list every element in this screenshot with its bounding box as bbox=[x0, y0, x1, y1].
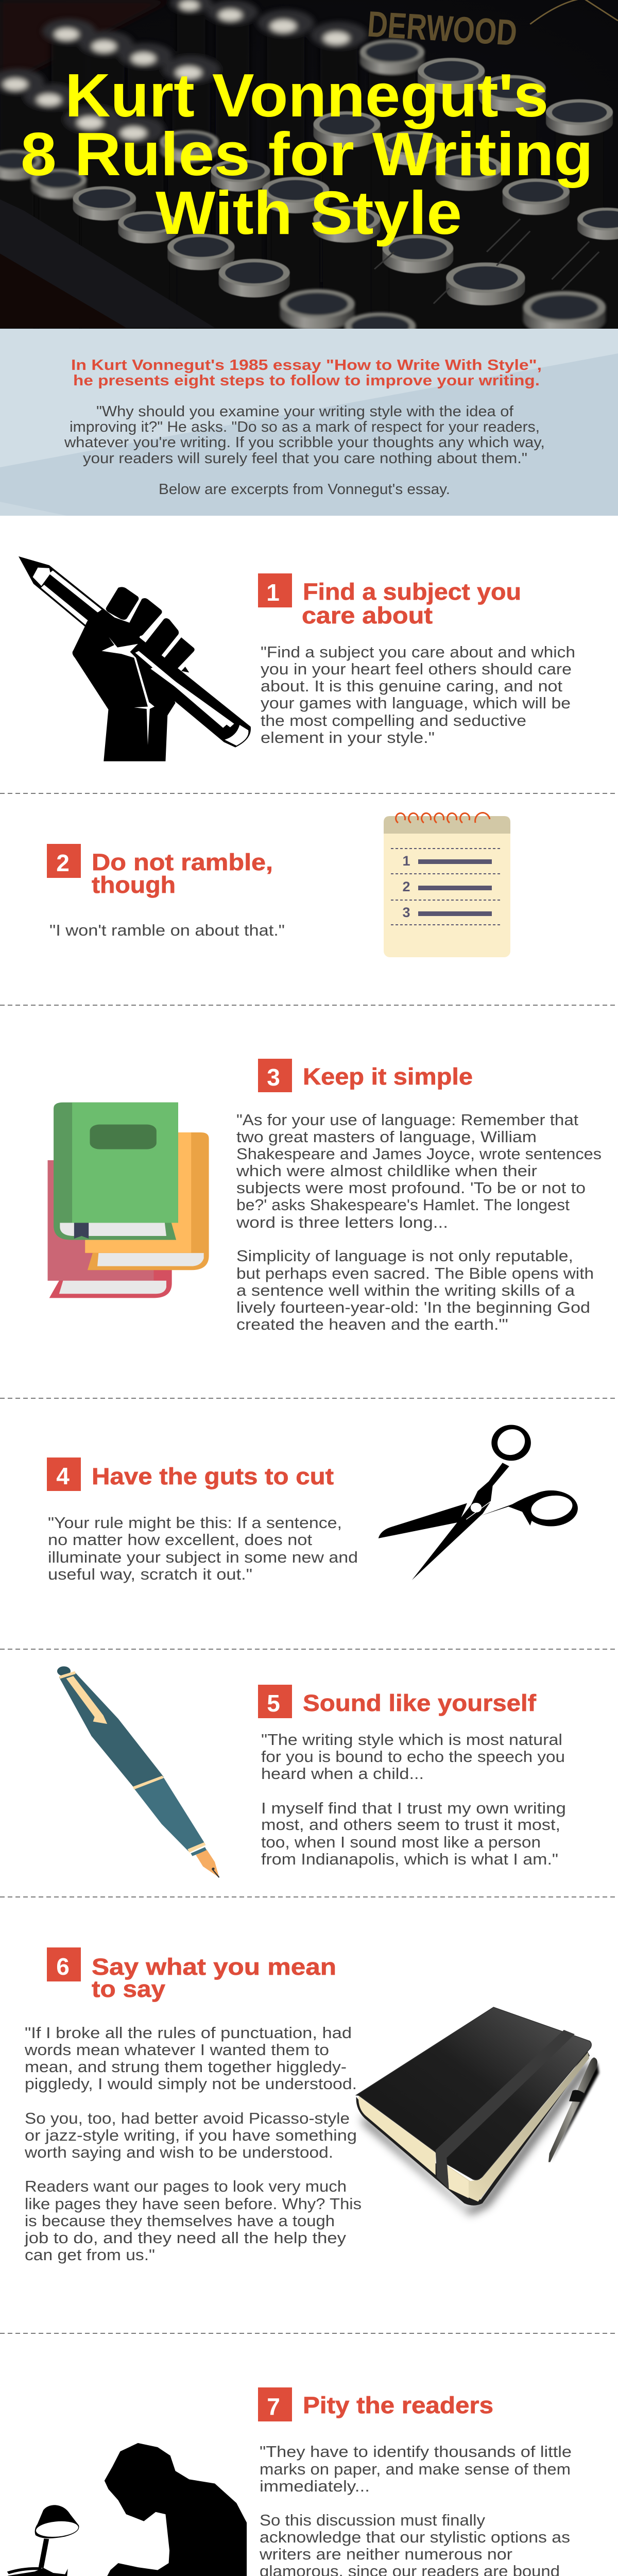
text 7 bbox=[259, 2443, 572, 2576]
number badge 7 bbox=[258, 2387, 292, 2421]
text 6: worth saying and wish to be understood. bbox=[24, 2143, 333, 2161]
typewriter keys photo bbox=[0, 0, 618, 329]
text 1: "Find a subject you care about and which bbox=[261, 643, 575, 661]
text 5: heard when a child... bbox=[261, 1765, 424, 1783]
hero: typewriter photo with title bbox=[0, 0, 618, 329]
text 6: So you, too, had better avoid Picasso-style bbox=[25, 2109, 350, 2127]
text 3: but perhaps even sacred. The Bible opens with bbox=[236, 1264, 594, 1282]
heading 1: Find a subject you bbox=[303, 579, 521, 605]
number badge 2: 2 bbox=[56, 850, 70, 876]
text 7: writers are neither numerous nor bbox=[259, 2545, 512, 2563]
text 3: which were almost childlike when their bbox=[236, 1162, 537, 1180]
heading 2: though bbox=[92, 872, 176, 898]
intro heading: he presents eight steps to follow to improve your writing. bbox=[73, 372, 540, 389]
intro heading bbox=[71, 357, 542, 389]
text 6: words mean whatever I wanted them to bbox=[24, 2041, 329, 2059]
text 6: job to do, and they need all the help they bbox=[24, 2229, 347, 2247]
icon: black notebook and pen bbox=[356, 2007, 599, 2214]
text 7: acknowledge that our stylistic options as bbox=[260, 2528, 570, 2546]
text 7: So this discussion must finally bbox=[260, 2511, 486, 2529]
text 6: is because they themselves have a tough bbox=[25, 2212, 335, 2230]
icon: notepad: 1 bbox=[402, 853, 410, 869]
heading 3: Keep it simple bbox=[303, 1063, 473, 1090]
text 2: "I won't ramble on about that." bbox=[49, 921, 285, 939]
heading 1: care about bbox=[302, 602, 433, 629]
intro text: whatever you're writing. If you scribble your thoughts any which way, bbox=[64, 434, 545, 451]
heading 7: Pity the readers bbox=[303, 2392, 493, 2418]
heading 2: Do not ramble, bbox=[92, 849, 273, 875]
text 6: like pages they have seen before. Why? This bbox=[25, 2195, 362, 2213]
heading 2 bbox=[92, 849, 273, 898]
text 4: illuminate your subject in some new and bbox=[48, 1548, 358, 1566]
text 7: marks on paper, and make sense of them bbox=[260, 2460, 571, 2478]
text 5: I myself find that I trust my own writing bbox=[261, 1799, 566, 1817]
text 6 bbox=[24, 2024, 362, 2264]
number badge 1 bbox=[258, 573, 292, 607]
text 3: a sentence well within the writing skills of a bbox=[236, 1281, 575, 1299]
number badge 7: 7 bbox=[267, 2393, 280, 2420]
heading 6 bbox=[92, 1954, 336, 2002]
text 5: most, and others seem to trust it most, bbox=[261, 1816, 560, 1834]
text 6: Readers want our pages to look very much bbox=[25, 2177, 347, 2195]
text 5: from Indianapolis, which is what I am." bbox=[261, 1850, 558, 1868]
text 4: useful way, scratch it out." bbox=[48, 1565, 252, 1583]
panel: introduction bbox=[0, 329, 618, 516]
rule 1 panel bbox=[19, 556, 575, 761]
text 6: or jazz-style writing, if you have something bbox=[25, 2126, 357, 2144]
rule 5 panel bbox=[57, 1666, 566, 1877]
text 4: no matter how excellent, does not bbox=[48, 1531, 312, 1549]
text 4 bbox=[48, 1514, 358, 1583]
number badge 5: 5 bbox=[267, 1690, 280, 1717]
text 4: "Your rule might be this: If a sentence, bbox=[48, 1514, 342, 1532]
icon: fist holding pencil bbox=[19, 556, 251, 761]
rule 6 panel bbox=[24, 1947, 599, 2264]
number badge 3 bbox=[258, 1059, 292, 1092]
heading 6: Say what you mean bbox=[92, 1954, 336, 1980]
icon: silhouette of writer at typewriter bbox=[8, 2443, 247, 2576]
text 3: lively fourteen-year-old: 'In the beginning God bbox=[236, 1298, 590, 1316]
icon: notepad bbox=[384, 813, 510, 957]
icon: scissors bbox=[379, 1425, 578, 1580]
number badge 6: 6 bbox=[56, 1953, 70, 1980]
heading 6: to say bbox=[92, 1976, 165, 2002]
text 5 bbox=[261, 1731, 566, 1868]
text 3 bbox=[236, 1111, 602, 1333]
text 5: too, when I sound most like a person bbox=[261, 1833, 541, 1851]
number badge 1: 1 bbox=[266, 579, 280, 606]
title: 8 Rules for Writing bbox=[21, 120, 593, 189]
text 6: piggledy, I would simply not be understood. bbox=[25, 2075, 357, 2093]
icon: stack of books bbox=[48, 1103, 209, 1298]
number badge 5 bbox=[258, 1685, 292, 1718]
text 7: "They have to identify thousands of little bbox=[260, 2443, 572, 2461]
text 3: be?' asks Shakespeare's Hamlet. The longest bbox=[236, 1196, 570, 1214]
rule 4 panel bbox=[47, 1425, 578, 1583]
number badge 2 bbox=[47, 844, 81, 878]
text 1: about. It is this genuine caring, and not bbox=[261, 677, 562, 695]
icon: fountain pen bbox=[57, 1666, 219, 1877]
text 3: "As for your use of language: Remember that bbox=[236, 1111, 578, 1129]
intro text: improving it?" He asks. "Do so as a mark of respect for your readers, bbox=[70, 419, 540, 435]
intro text: Below are excerpts from Vonnegut's essay. bbox=[159, 481, 450, 498]
text 1: you in your heart feel others should care bbox=[261, 660, 572, 678]
text 7: immediately... bbox=[260, 2477, 370, 2495]
rule 7 panel bbox=[8, 2387, 572, 2576]
rule 3 panel bbox=[48, 1059, 602, 1333]
text 1: element in your style." bbox=[261, 728, 435, 747]
intro text: your readers will surely feel that you care nothing about them." bbox=[83, 450, 527, 467]
intro heading: In Kurt Vonnegut's 1985 essay "How to Write With Style", bbox=[71, 357, 542, 374]
rule 2 panel bbox=[47, 813, 510, 957]
title bbox=[21, 61, 593, 247]
text 6: "If I broke all the rules of punctuation, had bbox=[25, 2024, 352, 2042]
title: With Style bbox=[156, 179, 462, 247]
text 1: the most compelling and seductive bbox=[261, 711, 526, 730]
text 3: Shakespeare and James Joyce, wrote sentences bbox=[236, 1145, 602, 1163]
heading 5: Sound like yourself bbox=[303, 1690, 537, 1716]
number badge 4: 4 bbox=[56, 1463, 70, 1489]
typewriter keys photo: DERWOOD bbox=[366, 4, 519, 53]
text 1: your games with language, which will be bbox=[261, 694, 571, 712]
text 5: "The writing style which is most natural bbox=[261, 1731, 562, 1749]
text 6: can get from us." bbox=[25, 2246, 155, 2264]
text 6: mean, and strung them together higgledy- bbox=[25, 2058, 347, 2076]
icon: notepad: 2 bbox=[402, 879, 410, 894]
intro text bbox=[64, 403, 545, 498]
text 3: created the heaven and the earth."' bbox=[236, 1315, 508, 1333]
text 5: for you is bound to echo the speech you bbox=[261, 1748, 565, 1766]
number badge 6 bbox=[47, 1947, 81, 1981]
number badge 4 bbox=[47, 1458, 81, 1491]
text 3: subjects were most profound. 'To be or not to bbox=[236, 1179, 586, 1197]
text 3: word is three letters long... bbox=[236, 1213, 448, 1231]
heading 1 bbox=[302, 579, 521, 629]
text 3: Simplicity of language is not only reputable, bbox=[236, 1247, 573, 1265]
heading 4: Have the guts to cut bbox=[92, 1463, 334, 1489]
text 3: two great masters of language, William bbox=[236, 1128, 537, 1146]
intro text: "Why should you examine your writing style with the idea of bbox=[96, 403, 514, 420]
title: Kurt Vonnegut's bbox=[65, 61, 548, 130]
text 1 bbox=[261, 643, 575, 747]
icon: notepad: 3 bbox=[402, 905, 410, 920]
number badge 3: 3 bbox=[267, 1064, 280, 1091]
